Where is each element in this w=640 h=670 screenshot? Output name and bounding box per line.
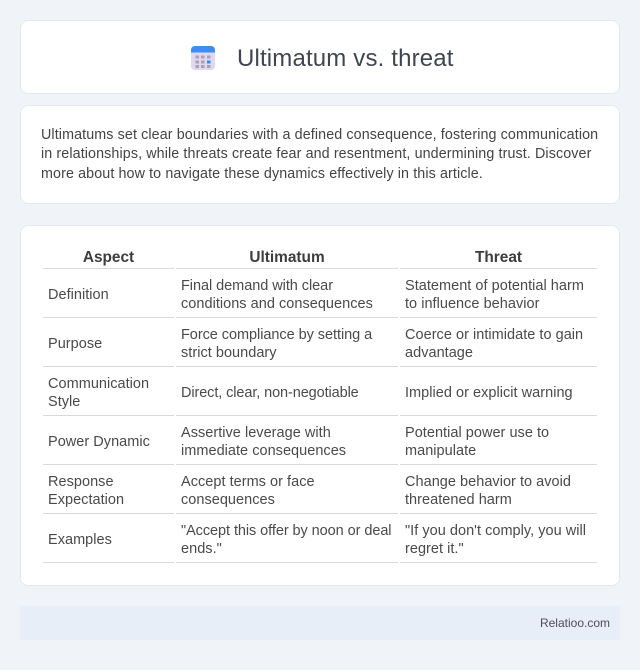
row: communication style: Direct, clear, non-negotiable bbox=[181, 385, 359, 401]
row: response expectation: consequences bbox=[181, 492, 275, 508]
row: purpose bbox=[43, 327, 597, 367]
row: power dynamic: manipulate bbox=[405, 443, 476, 459]
row: examples: regret it." bbox=[405, 541, 464, 557]
row: communication style: Implied or explicit warning bbox=[405, 385, 573, 401]
row: power dynamic bbox=[43, 425, 597, 465]
row: purpose: strict boundary bbox=[181, 345, 277, 361]
row: power dynamic: Assertive leverage with bbox=[181, 425, 331, 441]
row: definition bbox=[43, 278, 597, 318]
row: purpose: Purpose bbox=[48, 336, 102, 352]
row: examples: "If you don't comply, you will bbox=[405, 523, 586, 539]
row: definition: conditions and consequences bbox=[181, 296, 373, 312]
table header: Ultimatum bbox=[249, 249, 325, 266]
row: purpose: Force compliance by setting a bbox=[181, 327, 372, 343]
row: response expectation: Response bbox=[48, 474, 114, 490]
row: examples: Examples bbox=[48, 532, 112, 548]
title: Ultimatum vs. threat bbox=[237, 45, 454, 72]
row: definition: Statement of potential harm bbox=[405, 278, 584, 294]
table header: Aspect bbox=[83, 249, 134, 266]
row: definition: Final demand with clear bbox=[181, 278, 333, 294]
row: purpose: Coerce or intimidate to gain bbox=[405, 327, 583, 343]
row: power dynamic: immediate consequences bbox=[181, 443, 346, 459]
footer bar bbox=[20, 606, 620, 640]
row: response expectation: threatened harm bbox=[405, 492, 512, 508]
row: examples bbox=[43, 523, 597, 563]
row: definition: Definition bbox=[48, 287, 109, 303]
panel: comparison table bbox=[20, 225, 620, 586]
row: examples: "Accept this offer by noon or deal bbox=[181, 523, 391, 539]
panel: intro bbox=[20, 105, 620, 204]
intro text: Ultimatums set clear boundaries with a defined consequence, fostering communication bbox=[41, 127, 598, 143]
row: response expectation bbox=[43, 474, 597, 514]
table header: Threat bbox=[475, 249, 522, 266]
row: definition: to influence behavior bbox=[405, 296, 539, 312]
intro text: more about how to navigate these dynamics effectively in this article. bbox=[41, 166, 483, 182]
row: communication style: Style bbox=[48, 394, 80, 410]
row: power dynamic: Power Dynamic bbox=[48, 434, 150, 450]
row: examples: ends." bbox=[181, 541, 222, 557]
row: response expectation: Accept terms or face bbox=[181, 474, 315, 490]
intro text bbox=[41, 127, 598, 182]
table header bbox=[43, 249, 597, 269]
intro text: in relationships, while threats create fear and resentment, undermining trust. Discover bbox=[41, 146, 591, 162]
header panel bbox=[20, 20, 620, 94]
row: purpose: advantage bbox=[405, 345, 473, 361]
row: communication style bbox=[43, 376, 597, 416]
footer text: Relatioo.com bbox=[540, 616, 610, 630]
row: response expectation: Change behavior to avoid bbox=[405, 474, 571, 490]
icon: calendar bbox=[191, 46, 215, 70]
row: communication style: Communication bbox=[48, 376, 149, 392]
row: response expectation: Expectation bbox=[48, 492, 124, 508]
row: power dynamic: Potential power use to bbox=[405, 425, 549, 441]
